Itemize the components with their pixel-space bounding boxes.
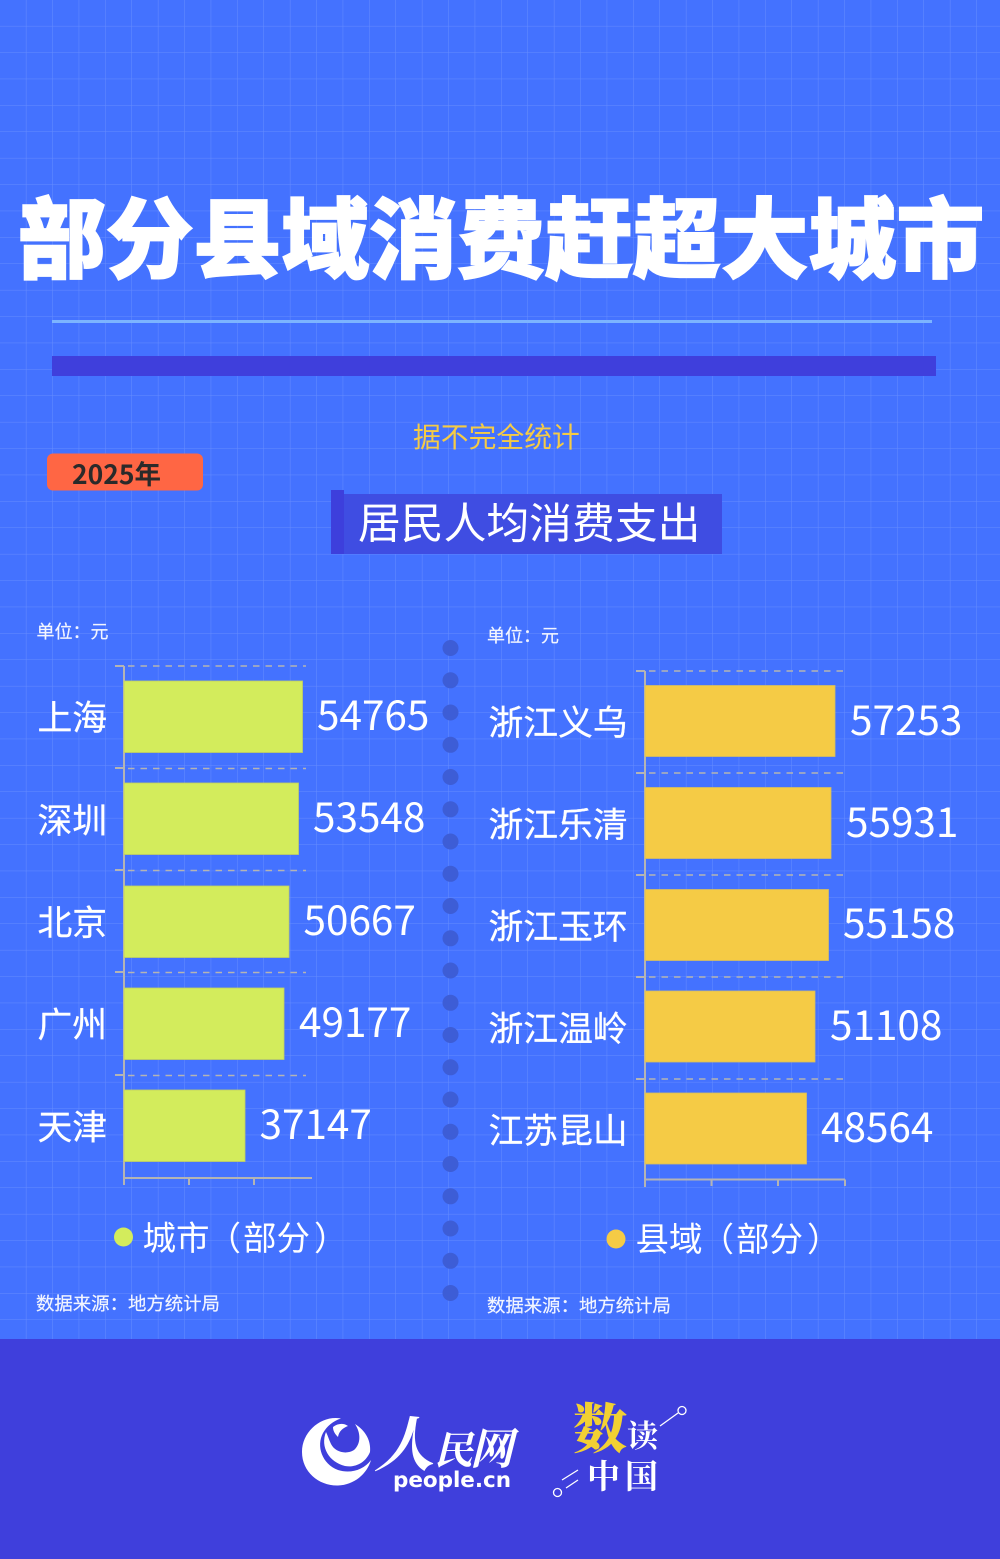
title dark band <box>52 356 936 376</box>
footer band <box>0 1339 1000 1559</box>
county values: 55931 <box>846 790 958 849</box>
county labels: 浙江玉环 <box>488 900 628 950</box>
center dotted divider <box>442 640 458 1301</box>
axes left <box>115 666 312 1185</box>
county values: 55158 <box>843 891 955 950</box>
city values: 49177 <box>299 990 411 1049</box>
city values: 50667 <box>304 888 416 947</box>
city values: 53548 <box>313 785 425 844</box>
unit label left: 单位：元 <box>36 618 108 644</box>
legend: counties: 县域（部分） <box>636 1212 840 1261</box>
city labels: 深圳 <box>38 794 107 844</box>
county values <box>821 688 962 1154</box>
bars right <box>645 686 835 1164</box>
city labels: 北京 <box>38 896 107 946</box>
county labels: 浙江温岭 <box>488 1002 628 1052</box>
year tag: 2025年 <box>72 453 161 492</box>
logo wordmark: people.cn <box>393 1468 511 1493</box>
logo: data reads China: 读 <box>627 1411 659 1456</box>
city values <box>260 683 429 1151</box>
county values: 57253 <box>850 688 962 747</box>
panel: counties chart <box>487 622 962 1318</box>
source left: 数据来源：地方统计局 <box>36 1290 220 1316</box>
unit label right: 单位：元 <box>487 622 559 648</box>
icon: people.cn globe <box>302 1418 371 1486</box>
logo wordmark: 人 <box>374 1398 434 1484</box>
logo: data reads China: 数 <box>573 1387 627 1464</box>
axes right <box>636 671 845 1187</box>
legend: cities: 城市（部分） <box>142 1211 348 1260</box>
city labels: 广州 <box>38 998 107 1048</box>
city values: 54765 <box>317 683 429 742</box>
source right: 数据来源：地方统计局 <box>487 1292 671 1318</box>
title underline <box>52 320 932 323</box>
logo wordmark: 网 <box>470 1416 519 1477</box>
year tag <box>47 453 203 492</box>
city values: 37147 <box>260 1092 372 1151</box>
county values: 48564 <box>821 1095 933 1154</box>
subtitle note: 据不完全统计 <box>413 416 580 456</box>
county labels: 浙江乐清 <box>488 798 628 848</box>
chart heading: 居民人均消费支出 <box>358 490 700 552</box>
title: 部分县域消费赶超大城市 <box>18 170 984 297</box>
bars left <box>124 681 302 1162</box>
logo: data reads China <box>554 1387 686 1498</box>
logo: data reads China: 中国 <box>587 1451 663 1498</box>
county labels: 江苏昆山 <box>488 1104 628 1154</box>
logo wordmark: 民 <box>434 1420 475 1476</box>
county labels <box>488 696 628 1154</box>
gridlines right <box>649 671 846 1079</box>
city labels: 天津 <box>38 1100 107 1150</box>
city labels <box>38 691 107 1150</box>
gridlines left <box>128 666 306 1076</box>
panel: cities chart <box>36 618 429 1316</box>
county values: 51108 <box>830 993 942 1052</box>
logo wordmark <box>374 1398 519 1493</box>
county labels: 浙江义乌 <box>488 696 628 746</box>
city labels: 上海 <box>38 691 107 741</box>
